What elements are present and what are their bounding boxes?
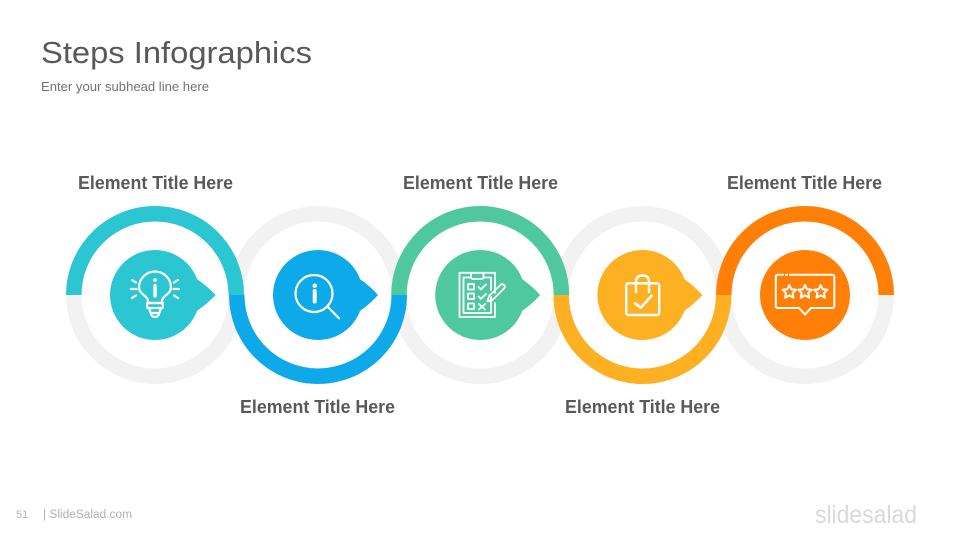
bubble: step 2 blue (273, 250, 378, 340)
icon: light bulb with info mark (131, 272, 179, 317)
label: step 3: Element Title Here (403, 173, 558, 193)
arc: step 3 green (399, 214, 561, 295)
arc: step 4 yellow (561, 295, 724, 376)
grey background rings (74, 214, 886, 376)
bubble: step 1 teal (110, 250, 216, 340)
title: Steps Infographics (41, 35, 312, 70)
label: step 4: Element Title Here (565, 397, 720, 417)
arc: step 5 orange (724, 214, 886, 295)
icon: shopping bag with check (626, 276, 659, 315)
bubble: step 3 green (435, 250, 540, 340)
arc: step 2 blue (237, 295, 399, 376)
bubble: step 4 yellow (597, 250, 702, 340)
footer: page number: 51 (16, 509, 28, 521)
label: step 1: Element Title Here (78, 173, 233, 193)
bubble: step 5 orange (760, 250, 850, 340)
logo: slidesalad: slidesalad (815, 501, 917, 529)
subhead: Enter your subhead line here (41, 80, 209, 94)
footer: site name: | SlideSalad.com (43, 509, 132, 521)
icon: magnifier with info mark (296, 275, 339, 318)
icon: checklist clipboard with pencil (460, 273, 505, 317)
label: step 2: Element Title Here (240, 397, 395, 417)
arc: step 1 teal (74, 214, 236, 295)
label: step 5: Element Title Here (727, 173, 882, 193)
icon: speech box with three stars (776, 275, 834, 314)
